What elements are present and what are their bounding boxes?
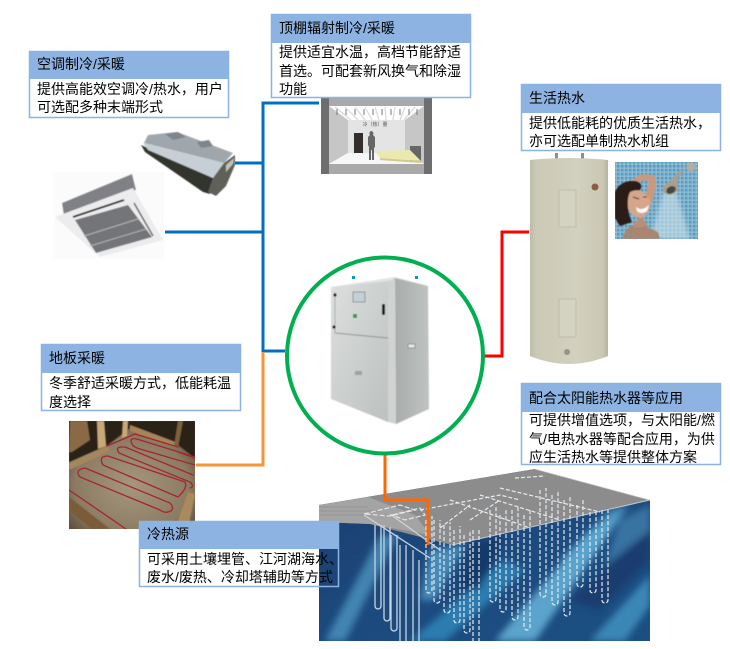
heading: 空调制冷/采暖 (37, 56, 125, 72)
description: 气/电热水器等配合应用，为供 (529, 431, 715, 447)
description: 功能 (279, 81, 307, 97)
buried pipe loops (420, 476, 608, 649)
green ring (287, 258, 483, 454)
panel: ceiling radiant (271, 14, 471, 98)
heading: 生活热水 (529, 90, 585, 106)
panel: domestic hot water (521, 84, 721, 150)
heading: 顶棚辐射制冷/采暖 (279, 20, 395, 36)
description: 废水/废热、冷却塔辅助等方式 (147, 569, 333, 585)
top surface of ground (319, 469, 650, 545)
description: 提供高能效空调冷/热水，用户 (37, 81, 223, 97)
connector: dark orange source pipe (385, 452, 428, 545)
heading: 配合太阳能热水器等应用 (529, 390, 683, 406)
connector: blue cooling and heating pipes (165, 103, 319, 351)
panel: cold and heat source (139, 521, 343, 586)
image: fan coil unit (141, 132, 235, 196)
description: 首选。可配套新风换气和除湿 (279, 63, 461, 79)
room caption: 冷（热）量 (362, 121, 388, 128)
panel: solar and other applications (521, 383, 721, 465)
description: 可采用土壤埋管、江河湖海水、 (147, 551, 343, 567)
heading: 冷热源 (147, 526, 189, 542)
description: 提供低能耗的优质生活热水， (529, 115, 711, 131)
description: 可提供增值选项，与太阳能/燃 (529, 412, 715, 428)
panel: air conditioning (29, 51, 229, 118)
icon: teal markers (352, 276, 418, 279)
description: 应生活热水等提供整体方案 (529, 449, 697, 465)
description: 度选择 (49, 394, 91, 410)
image: ceiling radiant room (321, 97, 432, 174)
image: woman in shower (615, 162, 698, 239)
panel: floor heating (41, 344, 241, 410)
heading: 地板采暖 (49, 350, 105, 366)
image: ceiling cassette unit (54, 172, 164, 259)
connector: red hot water pipe (484, 232, 529, 356)
main unit with green ring (287, 258, 483, 454)
connector: orange floor heating pipe (196, 352, 263, 465)
image: hot water storage tank (530, 153, 608, 364)
description: 提供适宜水温，高档节能舒适 (279, 44, 461, 60)
description: 冬季舒适采暖方式，低能耗温 (49, 375, 231, 391)
description: 可选配多种末端形式 (37, 99, 163, 115)
image: ground heat exchanger block (319, 465, 650, 649)
image: floor heating photo (69, 421, 195, 529)
icon: heat pump cabinet (331, 277, 429, 424)
description: 亦可选配单制热水机组 (529, 133, 669, 149)
